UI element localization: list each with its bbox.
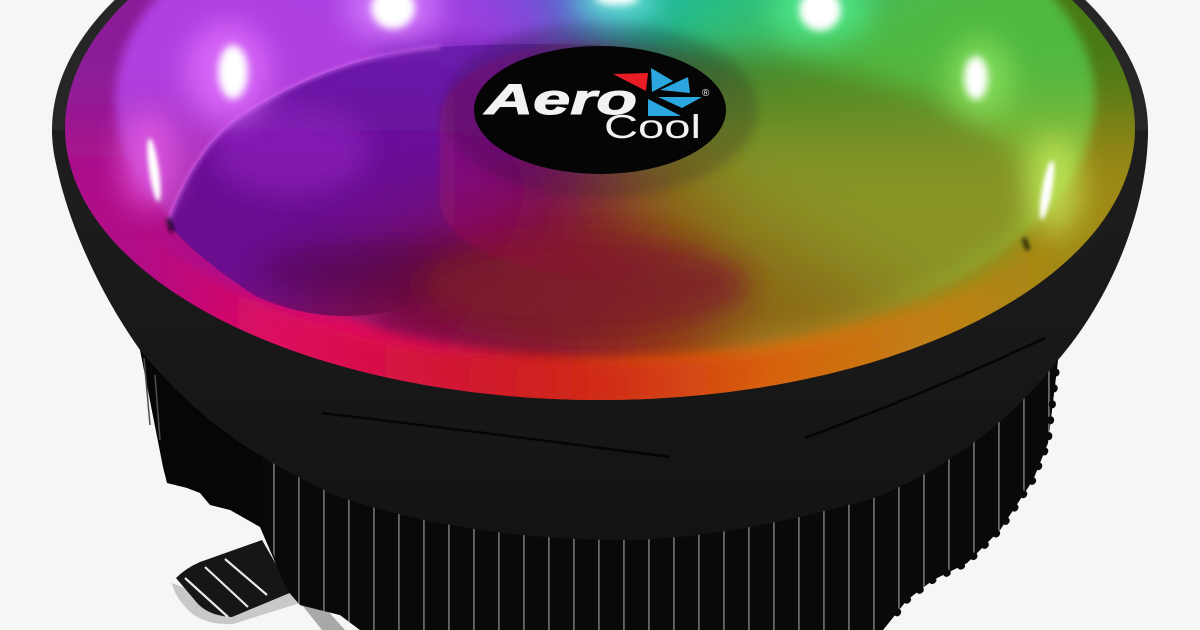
rgb outer lip bbox=[65, 0, 1135, 400]
dish bright edge bbox=[168, 47, 1028, 250]
bowl inner wall bbox=[110, 0, 1100, 360]
led glows bbox=[120, 0, 1081, 235]
lip colour band bbox=[130, 240, 1070, 384]
logo emblem bbox=[613, 68, 702, 116]
logo wordmark: Aero bbox=[483, 76, 637, 124]
fan shroud body bbox=[52, 0, 1148, 540]
raised hub skirt bbox=[440, 22, 760, 280]
lower dish smoothing bbox=[420, 237, 750, 333]
hub logo: AeroCool bbox=[474, 46, 726, 174]
fan blade dish bbox=[168, 32, 1035, 360]
heatsink fins bbox=[140, 350, 1058, 630]
shroud notch lines bbox=[322, 338, 1045, 457]
logo wordmark: ® bbox=[702, 88, 710, 99]
logo wordmark: Cool bbox=[604, 108, 701, 145]
logo wordmark bbox=[483, 76, 710, 145]
mounting bracket clip bbox=[172, 540, 345, 630]
